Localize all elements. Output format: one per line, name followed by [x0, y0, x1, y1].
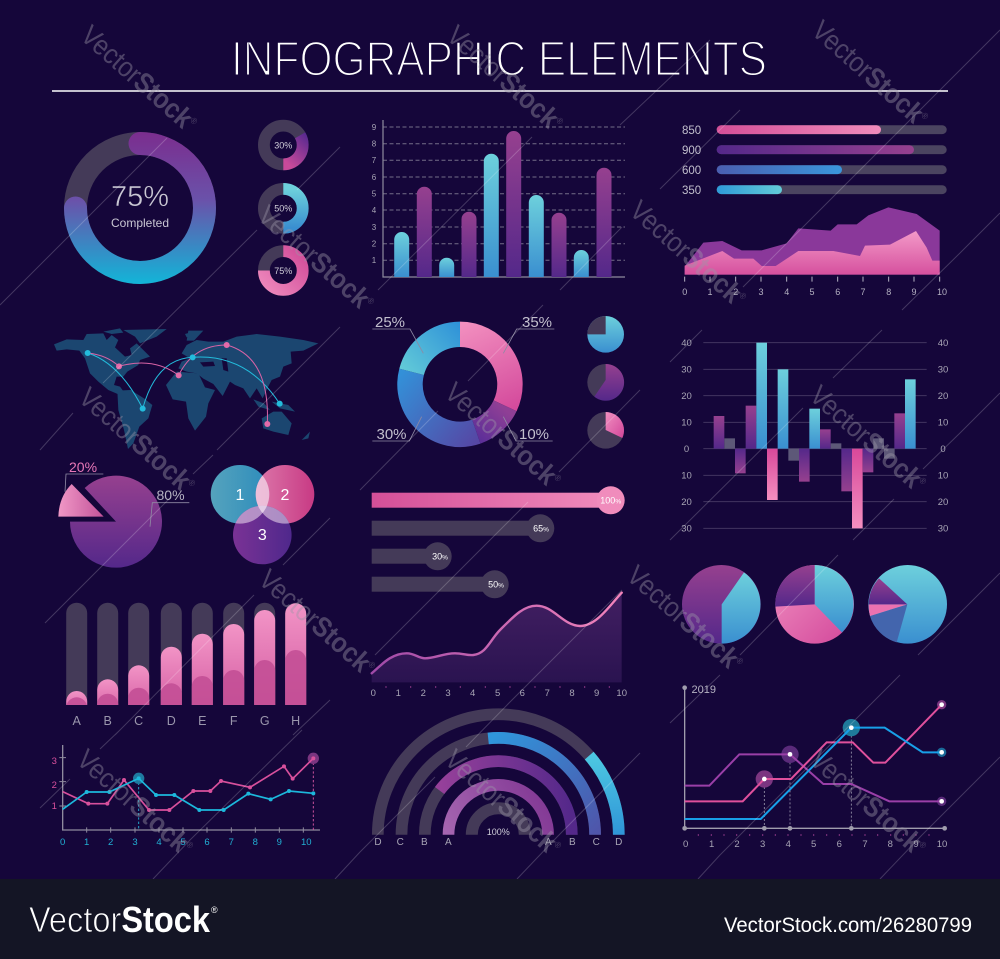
donut with percentage callouts: 10% — [519, 426, 549, 443]
radial arc chart — [374, 714, 622, 848]
VectorStock watermarks: VectorStock — [441, 19, 571, 140]
VectorStock watermarks: VectorStock — [73, 381, 203, 502]
footer bar: VectorStock.com/26280799 — [724, 914, 972, 937]
VectorStock watermarks: VectorStock — [806, 14, 936, 135]
horizontal progress bars: 350 — [682, 185, 701, 197]
VectorStock watermarks: ® — [552, 839, 564, 851]
positive/negative bar chart — [681, 338, 948, 534]
layered area chart: 4 — [784, 287, 789, 297]
layered area chart: 6 — [835, 287, 840, 297]
step line chart 2019: 4 — [786, 839, 791, 850]
small line chart: 8 — [253, 837, 258, 848]
layered area chart: 3 — [758, 287, 764, 297]
layered area chart: 7 — [860, 287, 866, 297]
VectorStock watermarks: ® — [365, 295, 377, 307]
VectorStock watermarks: ® — [554, 115, 566, 127]
small line chart: 10 — [301, 837, 312, 848]
radial arc chart: C — [593, 837, 600, 848]
pill bar chart A-H — [66, 603, 306, 733]
layered area chart: 10 — [937, 287, 947, 297]
step line chart 2019: 3 — [760, 839, 765, 850]
bar chart 0-9: 5 — [372, 190, 377, 198]
smooth area chart: 3 — [445, 688, 451, 699]
step line chart 2019: 2 — [734, 839, 740, 850]
donut: 75% completed — [76, 144, 204, 272]
positive/negative bar chart: 20 — [938, 391, 948, 402]
pill bar chart A-H: F — [230, 714, 238, 728]
layered area chart: 9 — [911, 287, 917, 297]
positive/negative bar chart: 10 — [938, 470, 948, 482]
mini donut 50%: 50% — [274, 204, 292, 214]
positive/negative bar chart: 10 — [681, 418, 692, 428]
step line chart 2019: 6 — [837, 839, 842, 850]
layered area chart: 8 — [886, 287, 891, 297]
radial arc chart: D — [615, 837, 622, 848]
venn diagram — [211, 465, 314, 564]
horizontal progress bars: 850 — [682, 125, 701, 137]
smooth area chart — [371, 593, 627, 699]
mini donut 50% — [264, 189, 303, 228]
progress bars with end circles — [372, 486, 625, 598]
footer bar: VectorStock — [29, 899, 211, 940]
mini donut 30%: 30% — [274, 140, 292, 150]
VectorStock watermarks: VectorStock — [439, 376, 569, 497]
small line chart: 3 — [52, 756, 57, 767]
venn diagram: 3 — [258, 527, 267, 544]
pie 80/20 with callouts: 20% — [69, 459, 97, 475]
small line chart: 5 — [180, 837, 186, 848]
small line chart: 2 — [52, 780, 57, 791]
positive/negative bar chart: 0 — [684, 444, 689, 455]
progress bars with end circles: 30% — [432, 552, 448, 562]
VectorStock watermarks: ® — [919, 110, 931, 122]
positive/negative bar chart: 40 — [938, 338, 948, 349]
donut with percentage callouts: 35% — [522, 314, 552, 331]
bar chart 0-9: 8 — [372, 140, 377, 148]
radial arc chart: A — [545, 837, 552, 848]
step line chart 2019: 10 — [937, 839, 947, 850]
VectorStock watermarks: ® — [734, 655, 746, 667]
layered area chart: 0 — [682, 287, 687, 297]
step line chart 2019: 9 — [913, 839, 919, 850]
VectorStock watermarks: VectorStock — [804, 743, 934, 864]
smooth area chart: 10 — [616, 688, 627, 699]
small line chart: 1 — [52, 801, 57, 812]
positive/negative bar chart: 30 — [938, 364, 948, 376]
VectorStock watermarks — [71, 14, 935, 862]
three large pie charts — [682, 565, 947, 644]
layered area chart: 1 — [707, 287, 713, 297]
smooth area chart: 6 — [520, 688, 525, 699]
small line chart — [52, 745, 320, 848]
horizontal progress bars: 900 — [682, 145, 701, 157]
positive/negative bar chart: 10 — [938, 418, 948, 428]
radial arc chart: 100% — [487, 827, 510, 837]
smooth area chart: 2 — [421, 688, 426, 699]
radial arc chart: A — [445, 837, 452, 848]
positive/negative bar chart: 30 — [938, 524, 948, 534]
VectorStock watermarks: ® — [184, 839, 196, 851]
venn diagram: 1 — [236, 487, 245, 504]
VectorStock watermarks: ® — [917, 475, 929, 487]
bar chart 0-9 — [372, 120, 625, 277]
mini donut 75%: 75% — [274, 266, 292, 276]
VectorStock watermarks: ® — [552, 472, 564, 484]
radial arc chart: D — [374, 837, 382, 848]
footer bar — [0, 879, 1000, 959]
pill bar chart A-H: B — [104, 714, 112, 728]
pill bar chart A-H: E — [198, 714, 206, 728]
positive/negative bar chart: 40 — [681, 338, 692, 349]
radial arc chart: B — [569, 837, 576, 848]
pill bar chart A-H: D — [167, 714, 176, 728]
small line chart: 7 — [229, 837, 234, 848]
step line chart 2019: 7 — [862, 839, 868, 850]
title: INFOGRAPHIC ELEMENTS — [231, 32, 767, 86]
small line chart: 4 — [156, 837, 162, 848]
bar chart 0-9: 3 — [372, 223, 377, 232]
step line chart 2019: 8 — [888, 839, 893, 850]
small line chart: 3 — [132, 837, 138, 848]
step line chart 2019: 1 — [709, 839, 714, 850]
step line chart 2019: 5 — [811, 839, 816, 850]
pie 80/20 with callouts: 80% — [156, 487, 185, 503]
pill bar chart A-H: C — [134, 714, 143, 728]
smooth area chart: 7 — [545, 688, 550, 699]
VectorStock watermarks: VectorStock — [71, 743, 201, 864]
mini donut 30% — [264, 126, 303, 164]
footer bar: ® — [211, 905, 218, 915]
radial arc chart: B — [421, 837, 428, 848]
smooth area chart: 9 — [594, 688, 599, 699]
layered area chart — [682, 207, 947, 297]
VectorStock watermarks: VectorStock — [75, 19, 205, 140]
VectorStock watermarks: VectorStock — [621, 559, 751, 680]
positive/negative bar chart: 10 — [681, 470, 692, 482]
smooth area chart: 0 — [371, 688, 376, 699]
step line chart 2019: 2019 — [692, 684, 716, 696]
positive/negative bar chart: 0 — [940, 444, 946, 455]
pie 80/20 with callouts — [58, 459, 189, 568]
pill bar chart A-H: G — [260, 714, 270, 728]
VectorStock watermarks: ® — [737, 290, 749, 302]
VectorStock watermarks: VectorStock — [252, 199, 382, 320]
donut: 75% completed: Completed — [111, 216, 169, 230]
positive/negative bar chart: 20 — [681, 497, 692, 508]
progress bars with end circles: 100% — [600, 496, 621, 506]
venn diagram: 2 — [281, 487, 290, 504]
horizontal progress bars: 600 — [682, 165, 701, 177]
layered area chart: 5 — [809, 287, 815, 297]
smooth area chart: 4 — [470, 688, 475, 699]
small line chart: 6 — [204, 837, 210, 848]
small line chart: 0 — [60, 837, 65, 848]
positive/negative bar chart: 30 — [681, 364, 692, 376]
positive/negative bar chart: 20 — [938, 497, 948, 508]
smooth area chart: 8 — [569, 688, 575, 699]
bar chart 0-9: 4 — [372, 206, 377, 215]
VectorStock watermarks: ® — [188, 115, 200, 127]
pill bar chart A-H: A — [73, 714, 82, 728]
progress bars with end circles: 65% — [533, 524, 549, 534]
bar chart 0-9: 2 — [372, 240, 377, 248]
small line chart: 9 — [277, 837, 282, 848]
step line chart 2019 — [682, 684, 947, 850]
layered area chart: 2 — [733, 287, 738, 297]
donut: 75% completed: 75% — [111, 181, 169, 213]
step line chart 2019: 0 — [683, 839, 688, 850]
world map with routes — [54, 328, 318, 449]
VectorStock watermarks: VectorStock — [624, 194, 754, 315]
horizontal progress bars — [682, 125, 947, 197]
three small pies — [587, 316, 624, 449]
VectorStock watermarks: VectorStock — [439, 743, 569, 864]
positive/negative bar chart: 30 — [681, 524, 692, 534]
VectorStock watermarks: VectorStock — [253, 563, 383, 684]
progress bars with end circles: 50% — [488, 580, 504, 590]
VectorStock watermarks: VectorStock — [804, 379, 934, 500]
smooth area chart: 1 — [396, 688, 401, 699]
bar chart 0-9: 1 — [372, 256, 377, 265]
bar chart 0-9: 9 — [372, 123, 377, 132]
donut with percentage callouts: 30% — [376, 426, 407, 443]
positive/negative bar chart: 20 — [681, 391, 692, 402]
radial arc chart: C — [397, 837, 404, 848]
mini donut 75% — [264, 251, 303, 290]
donut with percentage callouts: 25% — [375, 314, 405, 331]
VectorStock watermarks: ® — [186, 477, 198, 489]
smooth area chart: 5 — [495, 688, 500, 699]
small line chart: 1 — [84, 837, 89, 848]
donut with percentage callouts — [372, 314, 554, 443]
small line chart: 2 — [108, 837, 113, 848]
pill bar chart A-H: H — [291, 714, 300, 728]
bar chart 0-9: 6 — [372, 173, 377, 182]
bar chart 0-9: 7 — [372, 156, 377, 165]
VectorStock watermarks: ® — [917, 839, 929, 851]
VectorStock watermarks: ® — [366, 659, 378, 671]
